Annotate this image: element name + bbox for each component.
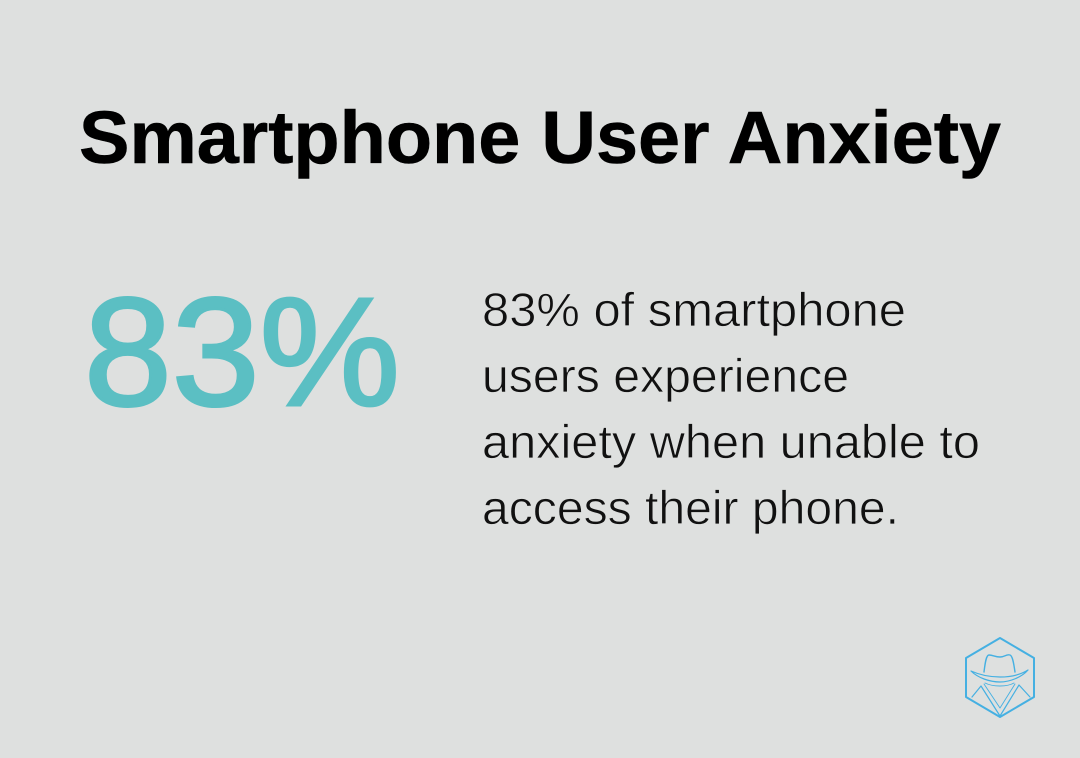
big statistic: 83%: 83% [84,266,400,438]
icon: hexagon logo with hatted figure [966,638,1034,717]
description text: access their phone. [482,481,899,534]
title: Smartphone User Anxiety [79,96,1001,179]
description text: 83% of smartphone [482,283,906,336]
description text: users experience [482,349,849,402]
description text [482,283,980,534]
description text: anxiety when unable to [482,415,980,468]
